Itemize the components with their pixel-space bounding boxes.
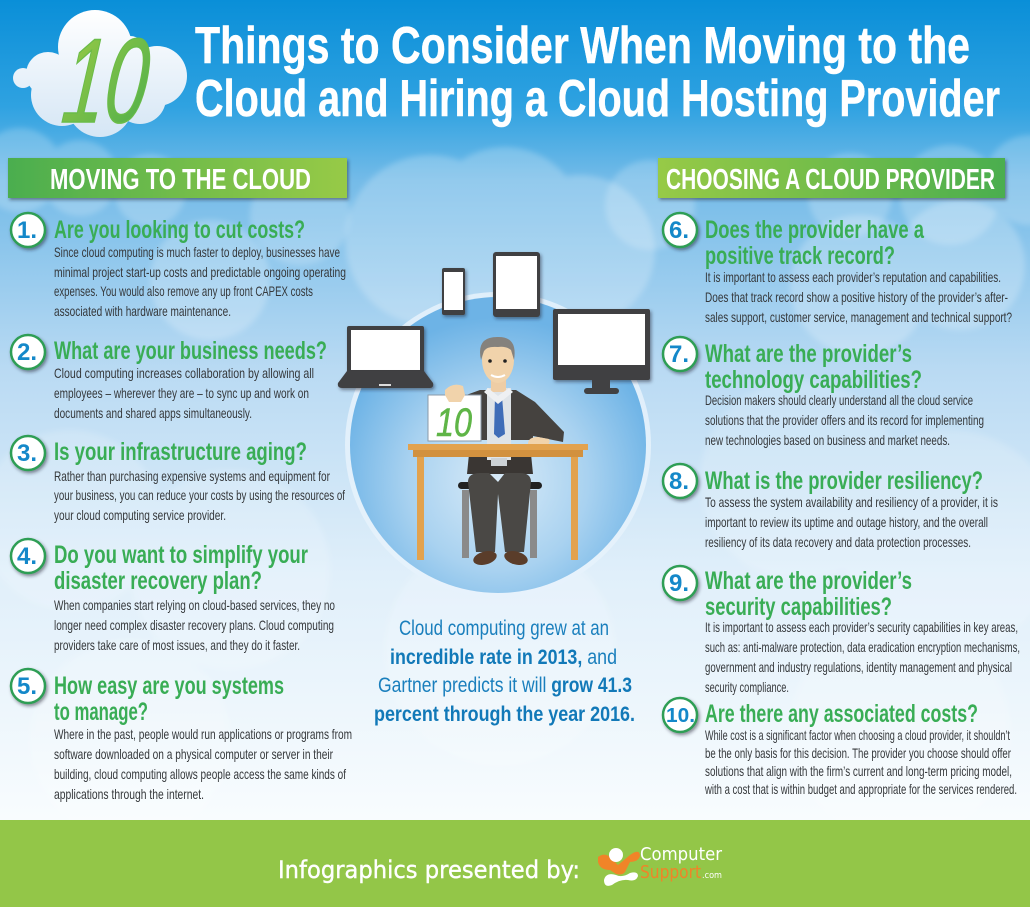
banner: moving to the cloud bbox=[8, 158, 347, 198]
panel: item 1: 1. bbox=[17, 217, 37, 244]
panel: item 3: Rather than purchasing expensive systems and equipment for bbox=[54, 468, 330, 484]
panel: item 5 bbox=[11, 669, 352, 802]
panel: item 5: applications through the internet. bbox=[54, 786, 204, 802]
panel: item 7: technology capabilities? bbox=[705, 366, 922, 394]
banner: moving to the cloud: MOVING TO THE CLOUD bbox=[50, 164, 311, 196]
panel: item 9: security capabilities? bbox=[705, 593, 892, 621]
footer band bbox=[0, 820, 1030, 907]
panel: item 3: your business, you can reduce your costs by using the resources of bbox=[54, 487, 345, 503]
man bbox=[452, 337, 564, 567]
callout: cloud computing growth: incredible rate in 2013, and bbox=[390, 646, 617, 669]
panel: item 2: Cloud computing increases collaboration by allowing all bbox=[54, 365, 314, 381]
logo: Computer Support: .com bbox=[702, 871, 722, 881]
panel: item 4: 4. bbox=[17, 543, 37, 570]
panel: item 9: What are the provider’s bbox=[705, 567, 912, 595]
logo: Computer Support bbox=[598, 844, 723, 886]
panel: item 4: Do you want to simplify your bbox=[54, 541, 308, 569]
panel: item 7: 7. bbox=[669, 341, 689, 368]
icon: phone bbox=[442, 268, 465, 315]
card with 10 bbox=[428, 385, 481, 445]
panel: item 6: Does the provider have a bbox=[705, 216, 925, 244]
callout: cloud computing growth bbox=[374, 617, 635, 726]
panel: item 9 bbox=[663, 566, 1020, 695]
panel: item 2: What are your business needs? bbox=[54, 337, 327, 365]
panel: item 1: Since cloud computing is much faster to deploy, businesses have bbox=[54, 244, 340, 260]
panel: item 6 bbox=[663, 213, 1012, 325]
card with 10: 10 bbox=[436, 401, 472, 445]
panel: item 5: to manage? bbox=[54, 698, 148, 726]
panel: item 10: 10. bbox=[666, 705, 695, 727]
icon: laptop bbox=[338, 326, 433, 388]
panel: item 3: your cloud computing service provider. bbox=[54, 507, 226, 523]
callout: cloud computing growth: Cloud computing grew at an bbox=[399, 617, 609, 640]
panel: item 6: 6. bbox=[669, 217, 689, 244]
panel: item 1: Are you looking to cut costs? bbox=[54, 216, 305, 244]
callout: cloud computing growth: percent through the year 2016. bbox=[374, 703, 635, 726]
icon: monitor bbox=[553, 309, 650, 394]
panel: item 5: software downloaded on a physical computer or server in their bbox=[54, 746, 333, 762]
panel: item 8: 8. bbox=[669, 468, 689, 495]
callout: cloud computing growth: Gartner predicts it will grow 41.3 bbox=[378, 674, 632, 697]
panel: item 2: 2. bbox=[17, 339, 37, 366]
panel: item 4: longer need complex disaster recovery plans. Cloud computing bbox=[54, 617, 334, 633]
panel: item 4: disaster recovery plan? bbox=[54, 567, 262, 595]
desk bbox=[408, 444, 588, 560]
panel: item 7: What are the provider’s bbox=[705, 340, 912, 368]
panel: item 1: associated with hardware maintenance. bbox=[54, 303, 231, 319]
panel: item 3: Is your infrastructure aging? bbox=[54, 438, 307, 466]
illustration: man with devices bbox=[338, 252, 651, 598]
circle backdrop bbox=[345, 292, 651, 598]
panel: item 4 bbox=[11, 539, 335, 653]
logo: Computer Support: Computer bbox=[640, 844, 723, 865]
panel: item 8 bbox=[663, 464, 998, 550]
panel: item 4: When companies start relying on cloud-based services, they no bbox=[54, 597, 335, 613]
panel: item 3 bbox=[11, 436, 345, 523]
panel: item 2: documents and shared apps simultaneously. bbox=[54, 405, 252, 421]
panel: item 2: employees – wherever they are – to sync up and work on bbox=[54, 385, 309, 401]
panel: item 1 bbox=[11, 213, 346, 319]
panel: item 1: minimal project start-up costs and predictable ongoing operating bbox=[54, 264, 346, 280]
background clouds bbox=[0, 128, 1030, 840]
icon: tablet bbox=[493, 252, 540, 317]
panel: item 5: How easy are you systems bbox=[54, 672, 284, 700]
panel: item 4: providers take care of most issues, and they do it faster. bbox=[54, 637, 300, 653]
panel: item 1: expenses. You would also remove any up front CAPEX costs bbox=[54, 283, 313, 299]
panel: item 5: building, cloud computing allows people access the same kinds of bbox=[54, 766, 346, 782]
cloud with 10 logo bbox=[13, 10, 187, 148]
panel: item 7 bbox=[663, 337, 984, 448]
title bbox=[195, 17, 1000, 128]
panel: item 9: 9. bbox=[669, 570, 689, 597]
panel: item 3: 3. bbox=[17, 440, 37, 467]
panel: item 2 bbox=[11, 335, 327, 421]
number 10: 10 bbox=[57, 14, 155, 148]
panel: item 5: 5. bbox=[17, 673, 37, 700]
panel: item 5: Where in the past, people would run applications or programs from bbox=[54, 726, 352, 742]
panel: item 9: security compliance. bbox=[705, 679, 789, 695]
footer credit text: Infographics presented by: bbox=[278, 856, 580, 884]
panel: item 6: positive track record? bbox=[705, 242, 895, 270]
panel: item 10 bbox=[663, 698, 1017, 797]
chair bbox=[458, 482, 542, 558]
logo: Computer Support: Support bbox=[640, 862, 701, 883]
